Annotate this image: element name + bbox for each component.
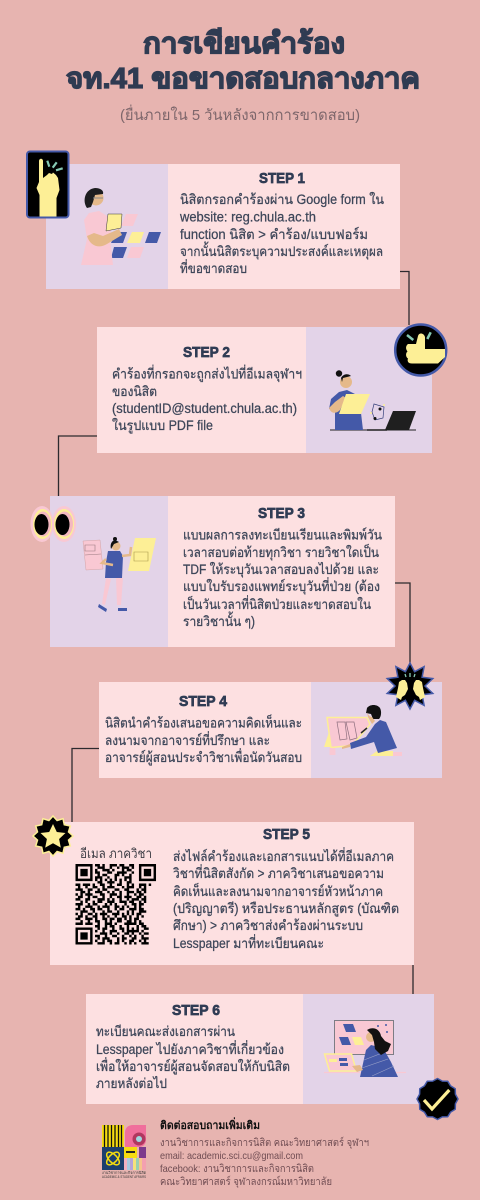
text block: เป็นวันเวลาที่นิสิตป่วยและขาดสอบใน	[183, 595, 371, 612]
text block: นิสิตนำคำร้องเสนอขอความคิดเห็นและ	[105, 714, 302, 730]
logo: งานวิชาการและกิจการนิสิต	[102, 1170, 147, 1175]
heading: STEP 4	[179, 693, 228, 710]
text block: จากนั้นนิสิตระบุความประสงค์และเหตุผล	[180, 241, 383, 260]
panel: step 5	[50, 822, 414, 965]
heading: STEP 5	[263, 826, 310, 843]
text block	[179, 191, 384, 276]
panel: step 2	[97, 327, 432, 453]
illustration: woman at desk with board	[324, 1020, 406, 1077]
logo: ACADEMIC & STUDENT AFFAIRS	[102, 1175, 147, 1179]
qr code	[76, 864, 156, 945]
text block: ภายหลังต่อไป	[96, 1076, 167, 1091]
text block: Lesspaper ไปยังภาควิชาที่เกี่ยวข้อง	[96, 1040, 284, 1057]
logo	[102, 1125, 147, 1179]
text block: คำร้องที่กรอกจะถูกส่งไปที่อีเมลจุฬาฯ	[112, 364, 302, 382]
subtitle: (ยื่นภายใน 5 วันหลังจากการขาดสอบ)	[120, 104, 360, 124]
text block: ส่งไฟล์คำร้องและเอกสารแนบได้ที่อีเมลภาค	[173, 847, 394, 864]
text block: Lesspaper มาที่ทะเบียนคณะ	[173, 934, 324, 951]
text block: ศึกษา) > ภาควิชาส่งคำร้องผ่านระบบ	[173, 918, 363, 933]
connector: step 3 to step 4	[395, 583, 410, 668]
text block: TDF ให้ระบุวันเวลาสอบลงไปด้วย และ	[183, 561, 379, 578]
text block: เวลาสอบต่อท้ายทุกวิชา รายวิชาใดเป็น	[183, 543, 379, 561]
connector: step 2 to step 3	[58, 436, 97, 496]
contact text: facebook: งานวิชาการและกิจการนิสิต	[160, 1163, 314, 1175]
contact text	[160, 1117, 369, 1188]
contact text: คณะวิทยาศาสตร์ จุฬาลงกรณ์มหาวิทยาลัย	[160, 1175, 332, 1188]
text block	[105, 714, 302, 766]
title: การเขียนคำร้อง	[143, 28, 345, 60]
contact text: email: academic.sci.cu@gmail.com	[160, 1150, 303, 1162]
panel: step 3	[50, 496, 395, 647]
panel: step 1	[46, 164, 400, 289]
text block: ในรูปแบบ PDF file	[112, 417, 213, 434]
heading: STEP 1	[259, 170, 305, 187]
icon: starburst hands	[387, 663, 433, 709]
panel: step 6	[86, 994, 434, 1104]
contact text: ติดต่อสอบถามเพิ่มเติม	[160, 1117, 260, 1132]
text block	[96, 1024, 290, 1091]
text block: แบบใบรับรองแพทย์ระบุวันที่ป่วย (ต้อง	[183, 577, 380, 595]
text block: (ปริญญาตรี) หรือประธานหลักสูตร (บัณฑิต	[173, 901, 399, 917]
title	[66, 28, 420, 95]
illustration: woman presenting screens	[83, 537, 156, 612]
qr label: อีเมล ภาควิชา	[80, 846, 152, 861]
icon: check badge	[417, 1078, 458, 1120]
panel: step 4	[99, 682, 442, 778]
connector: step 5 to step 6	[412, 965, 414, 994]
text block: คิดเห็นและลงนามจากอาจารย์หัวหน้าภาค	[173, 882, 383, 899]
text block	[183, 526, 382, 629]
text block: ที่ขอขาดสอบ	[180, 259, 247, 276]
connector: step 1 to step 2	[400, 272, 409, 325]
text block: website: reg.chula.ac.th	[179, 210, 316, 224]
title: จท.41 ขอขาดสอบกลางภาค	[66, 63, 420, 95]
text block: วิชาที่นิสิตสังกัด > ภาควิชาเสนอขอความ	[173, 864, 384, 881]
icon: one finger	[27, 152, 68, 218]
text block: ของนิสิต	[112, 384, 157, 399]
contact text: งานวิชาการและกิจการนิสิต คณะวิทยาศาสตร์ จุฬาฯ	[160, 1136, 369, 1149]
connector: step 4 to step 5	[72, 748, 99, 822]
text block	[112, 364, 302, 434]
illustration: woman with tablet and tiles	[81, 188, 161, 265]
illustration: woman drawing at easel	[324, 705, 402, 756]
heading: STEP 3	[258, 505, 305, 522]
heading: STEP 2	[183, 344, 230, 361]
text block: function นิสิต > คำร้อง/แบบฟอร์ม	[180, 226, 368, 242]
icon: big eyes	[30, 506, 76, 542]
icon: star badge	[33, 816, 73, 856]
icon: thumbs up	[395, 324, 446, 376]
illustration: woman with paper and laptop	[329, 370, 416, 430]
text block: แบบผลการลงทะเบียนเรียนและพิมพ์วัน	[183, 526, 382, 542]
text block: ทะเบียนคณะส่งเอกสารผ่าน	[96, 1024, 235, 1039]
text block: เพื่อให้อาจารย์ผู้สอนจัดสอบให้กับนิสิต	[96, 1057, 290, 1075]
text block: รายวิชานั้น ๆ)	[183, 611, 255, 629]
text block: ลงนามจากอาจารย์ที่ปรึกษา และ	[105, 731, 270, 748]
text block: (studentID@student.chula.ac.th)	[112, 401, 297, 416]
heading: STEP 6	[172, 1002, 220, 1019]
text block	[173, 847, 399, 951]
text block: นิสิตกรอกคำร้องผ่าน Google form ใน	[180, 191, 384, 207]
text block: อาจารย์ผู้สอนประจำวิชาเพื่อนัดวันสอบ	[105, 748, 302, 766]
